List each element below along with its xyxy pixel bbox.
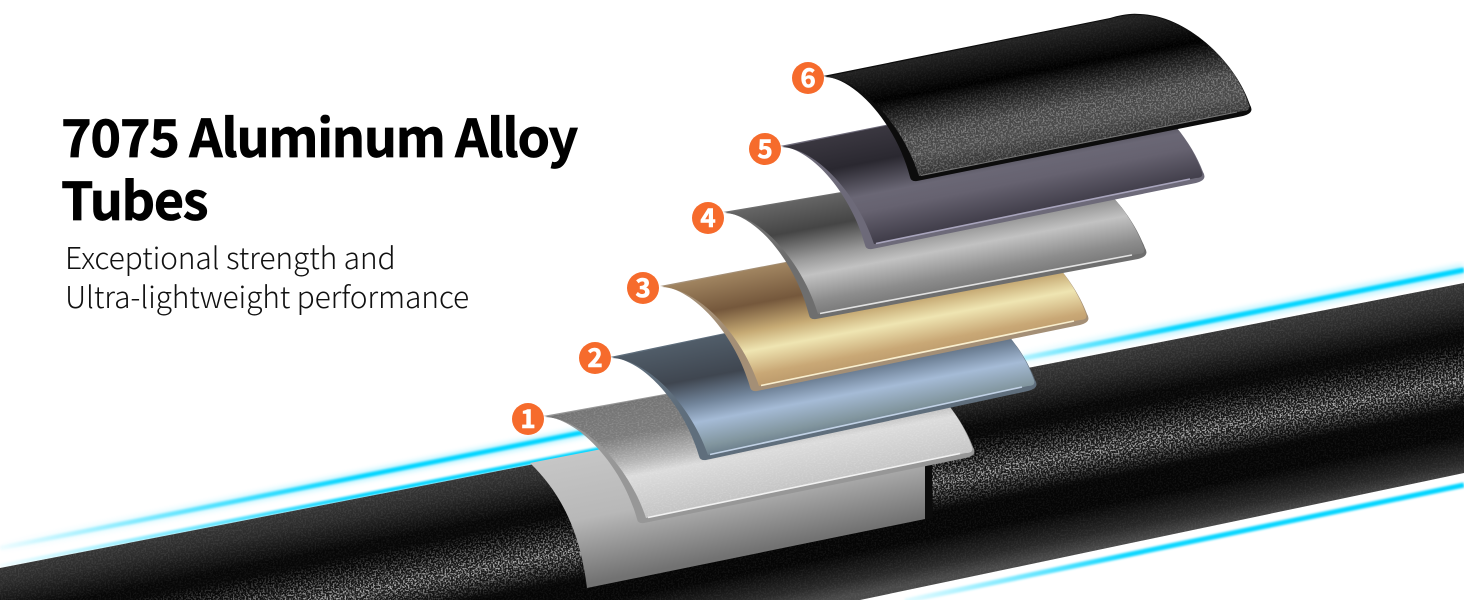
number badge 5: 5 — [757, 129, 773, 166]
black aluminum tube — [0, 283, 1464, 600]
title — [61, 97, 578, 235]
number badge 1: 1 — [520, 399, 536, 436]
number badge 3 — [627, 268, 659, 305]
title: 7075 Aluminum Alloy — [61, 97, 577, 172]
number badge 2 — [579, 338, 611, 375]
subtitle — [65, 234, 469, 317]
subtitle: Ultra-lightweight performance — [65, 273, 469, 317]
number badge 6: 6 — [800, 58, 816, 95]
number badge 4 — [692, 198, 724, 235]
number badge 3: 3 — [635, 268, 651, 305]
layer 2: blue-gray layer — [610, 290, 1036, 460]
layer 6: black textured layer — [823, 14, 1251, 181]
layer 1: silver brushed layer — [543, 357, 974, 523]
title: Tubes — [61, 160, 207, 235]
number badge 4: 4 — [700, 198, 716, 235]
number badge 5 — [749, 129, 781, 166]
layer 3: gold layer — [660, 224, 1088, 391]
exposed cut section of tube — [530, 430, 933, 588]
layer 5: dark violet layer — [780, 82, 1204, 249]
number badge 1 — [512, 399, 544, 436]
number badge 2: 2 — [587, 338, 603, 375]
layer 4: gray layer — [723, 158, 1146, 319]
blue light lines — [0, 270, 1464, 600]
number badge 6 — [792, 58, 824, 95]
subtitle: Exceptional strength and — [65, 234, 395, 278]
